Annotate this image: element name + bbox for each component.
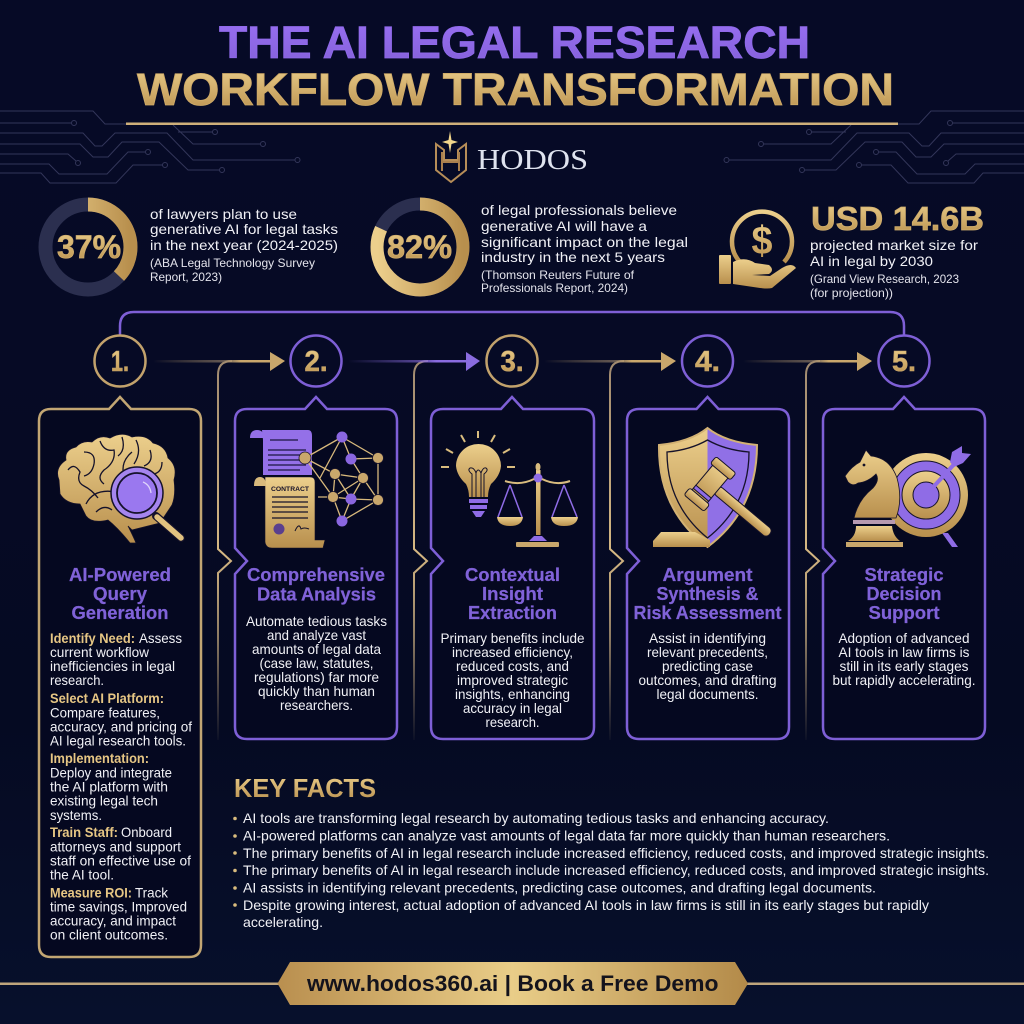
heading: Query	[93, 583, 148, 604]
stat text: Professionals Report, 2024)	[481, 281, 628, 295]
market size text: (for projection))	[810, 286, 893, 300]
panel: key facts	[233, 773, 989, 930]
step 4 number	[682, 336, 733, 386]
workflow steps list: Select AI Platform:	[50, 690, 164, 706]
heading: Comprehensive	[247, 564, 385, 585]
step 3 number: 3.	[500, 346, 524, 378]
workflow steps list: accuracy, and impact	[50, 912, 176, 928]
workflow steps list: Deploy and integrate	[50, 764, 172, 780]
body text	[638, 630, 776, 702]
heading	[247, 564, 385, 604]
workflow steps list: existing legal tech	[50, 792, 158, 808]
heading: Strategic	[864, 564, 944, 585]
body text: Adoption of advanced	[838, 630, 970, 646]
workflow steps list: Identify Need:	[50, 630, 135, 646]
workflow steps list: on client outcomes.	[50, 926, 168, 942]
heading: Generation	[72, 602, 168, 623]
donut 82%: 82%	[387, 229, 452, 265]
icon: contract and data network: CONTRACT	[271, 486, 309, 493]
heading: key facts: KEY FACTS	[234, 773, 376, 803]
icon: contract and data network	[250, 430, 384, 548]
step 2 number	[290, 336, 342, 386]
icon: brain with magnifier	[58, 434, 181, 543]
bullet list: Despite growing interest, actual adoption of advanced AI tools in law firms is still in its early stages but rapidly	[243, 897, 929, 913]
body text	[832, 630, 976, 688]
bullet list	[233, 810, 989, 930]
body text: legal documents.	[656, 686, 758, 702]
workflow steps list: staff on effective use of	[50, 852, 191, 868]
logo: Hodos: HODOS	[477, 144, 588, 176]
body text	[246, 613, 387, 713]
workflow steps list: systems.	[50, 807, 102, 823]
body text: outcomes, and drafting	[638, 672, 776, 688]
bullet list: AI assists in identifying relevant precedents, predicting case outcomes, and drafting legal documents.	[243, 880, 876, 896]
step 3 number	[486, 336, 538, 386]
heading: Argument	[662, 564, 752, 585]
icon: shield and gavel	[653, 428, 786, 553]
heading: Extraction	[468, 602, 557, 623]
heading: Synthesis &	[656, 583, 758, 604]
bullet list: The primary benefits of AI in legal research include increased efficiency, reduced costs, and improved strategic insights.	[243, 845, 989, 861]
workflow steps list: Track	[135, 884, 169, 900]
icon: hand holding dollar: $	[752, 219, 772, 263]
footer call to action: www.hodos360.ai | Book a Free Demo	[306, 971, 718, 996]
body text: research.	[486, 714, 540, 730]
workflow steps list	[50, 630, 192, 942]
stat text: of legal professionals believe	[481, 202, 677, 218]
market size text: (Grand View Research, 2023	[810, 272, 959, 286]
step numbers	[94, 336, 930, 386]
title: WORKFLOW TRANSFORMATION	[137, 64, 894, 115]
stat text: Report, 2023)	[150, 270, 222, 284]
heading	[634, 564, 782, 623]
workflow steps list: Compare features,	[50, 704, 160, 720]
body text: accuracy in legal	[463, 700, 562, 716]
step 5 number: 5.	[892, 346, 916, 378]
stat text: generative AI for legal tasks	[150, 221, 338, 237]
panel: step 1 AI-Powered Query Generation	[39, 397, 201, 957]
body text: quickly than human	[258, 683, 375, 699]
body text: but rapidly accelerating.	[832, 672, 976, 688]
step 1 number: 1.	[111, 346, 129, 378]
stat text: generative AI will have a	[481, 218, 647, 234]
donut 37%: 37%	[57, 229, 121, 265]
body text: insights, enhancing	[455, 686, 570, 702]
bullet list: The primary benefits of AI in legal research include increased efficiency, reduced costs, and improved strategic insights.	[243, 862, 989, 878]
bullet list: accelerating.	[243, 914, 323, 930]
body text: predicting case	[662, 658, 753, 674]
body text: amounts of legal data	[252, 641, 381, 657]
body text: Assist in identifying	[649, 630, 766, 646]
arrow: step 3 to 4	[544, 352, 676, 740]
body text: (case law, statutes,	[260, 655, 374, 671]
title	[137, 17, 894, 115]
body text	[440, 630, 585, 730]
stat: 37 percent	[46, 204, 338, 290]
body text: increased efficiency,	[452, 644, 573, 660]
body text: AI tools in law firms is	[838, 644, 970, 660]
heading: Insight	[482, 583, 543, 604]
panel: step 3 Contextual Insight Extraction	[431, 397, 594, 739]
stat text: in the next year (2024-2025)	[150, 237, 338, 253]
workflow steps list: research.	[50, 672, 104, 688]
heading: Decision	[866, 583, 942, 604]
donut 82%	[377, 204, 463, 290]
body text: relevant precedents,	[647, 644, 768, 660]
workflow steps list: Onboard	[121, 824, 172, 840]
bullet list: AI tools are transforming legal research by automating tedious tasks and enhancing accuracy.	[243, 810, 829, 826]
heading	[69, 564, 171, 623]
workflow steps list: time savings, Improved	[50, 898, 187, 914]
body text: improved strategic	[457, 672, 568, 688]
workflow steps list: the AI tool.	[50, 866, 114, 882]
workflow steps list: attorneys and support	[50, 838, 181, 854]
stat text	[150, 206, 338, 284]
step 2 number: 2.	[304, 346, 328, 378]
arrow: step 1 to 2	[153, 352, 285, 740]
workflow steps list: Train Staff:	[50, 824, 118, 840]
body text: researchers.	[280, 697, 353, 713]
step 4 number: 4.	[695, 346, 720, 378]
heading	[864, 564, 944, 623]
logo: Hodos	[436, 131, 588, 182]
body text: Automate tedious tasks	[246, 613, 387, 629]
connector: step 1 to step 5	[120, 312, 904, 336]
body text: still in its early stages	[840, 658, 968, 674]
workflow steps list: Implementation:	[50, 750, 149, 766]
arrow: step 4 to 5	[743, 352, 872, 740]
heading: Support	[868, 602, 940, 623]
stat text: significant impact on the legal	[481, 234, 688, 250]
workflow steps list: the AI platform with	[50, 778, 168, 794]
body text: Primary benefits include	[440, 630, 585, 646]
heading	[465, 564, 560, 623]
stat text	[481, 202, 688, 295]
heading: Risk Assessment	[634, 602, 782, 623]
market size text: projected market size for	[810, 237, 978, 253]
step 1 number	[94, 336, 146, 386]
body text: reduced costs, and	[456, 658, 569, 674]
bullet list: AI-powered platforms can analyze vast amounts of legal data far more quickly than human researchers.	[243, 828, 890, 844]
panel: step 4 Argument Synthesis & Risk Assessment	[627, 397, 789, 739]
panel: step 5 Strategic Decision Support	[823, 397, 985, 739]
icon: hand holding dollar	[719, 212, 796, 288]
stat text: of lawyers plan to use	[150, 206, 297, 222]
body text: regulations) far more	[254, 669, 379, 685]
stat text: industry in the next 5 years	[481, 249, 665, 265]
icon: light bulb and scales	[441, 431, 578, 547]
workflow steps list: accuracy, and pricing of	[50, 718, 192, 734]
title: THE AI LEGAL RESEARCH	[219, 17, 810, 68]
icon: chess knight and target	[845, 446, 971, 547]
workflow steps list: Assess	[139, 630, 182, 646]
panel: step 2 Comprehensive Data Analysis	[235, 397, 397, 739]
heading: AI-Powered	[69, 564, 171, 585]
market size figure: USD 14.6B	[811, 200, 984, 237]
footer call to action	[0, 962, 1024, 1005]
stat text: (ABA Legal Technology Survey	[150, 256, 315, 270]
workflow steps list: Measure ROI:	[50, 884, 132, 900]
heading: Contextual	[465, 564, 560, 585]
market size text	[810, 237, 978, 300]
market size text: AI in legal by 2030	[810, 253, 933, 269]
stat: 82 percent	[377, 202, 688, 295]
heading: Data Analysis	[257, 584, 376, 604]
workflow steps list: inefficiencies in legal	[50, 658, 175, 674]
donut 37%	[46, 204, 130, 290]
workflow steps list: AI legal research tools.	[50, 732, 186, 748]
workflow steps list: current workflow	[50, 644, 150, 660]
stat: market size	[719, 200, 984, 300]
stat text: (Thomson Reuters Future of	[481, 268, 635, 282]
arrow: step 2 to 3	[348, 352, 480, 740]
body text: and analyze vast	[267, 627, 366, 643]
step 5 number	[878, 336, 930, 386]
